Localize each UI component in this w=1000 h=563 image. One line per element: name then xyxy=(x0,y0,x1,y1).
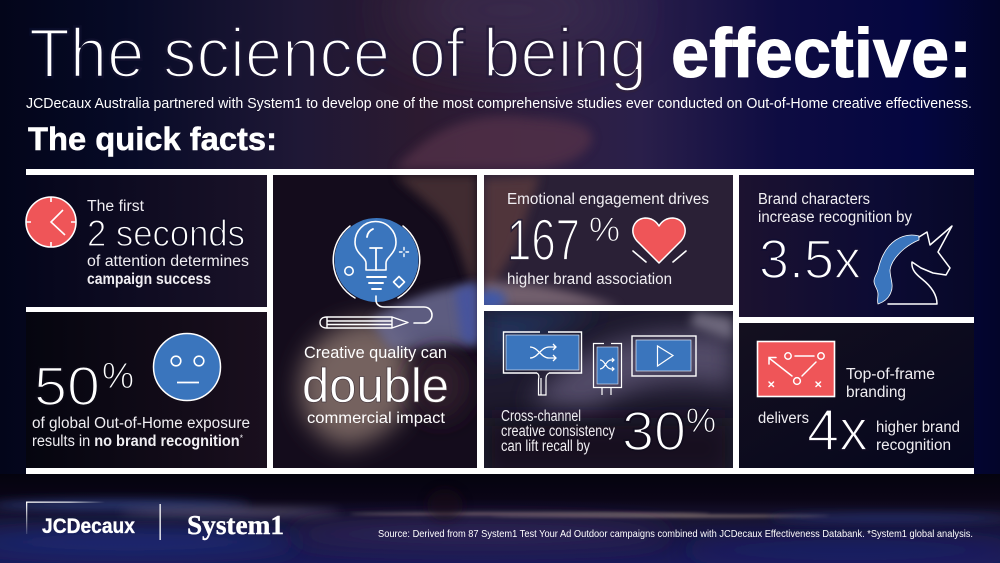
icon: light bulb and pencil xyxy=(320,218,432,328)
stat: 2 seconds: 2 seconds xyxy=(87,213,245,254)
text: higher brand recognition: recognition xyxy=(876,437,951,454)
icon: clock xyxy=(26,197,76,247)
text: higher brand recognition: higher brand xyxy=(876,419,960,436)
panel: cross-channel xyxy=(484,311,733,478)
text: no brand recognition: * xyxy=(240,433,243,443)
text: commercial impact: commercial impact xyxy=(307,410,446,427)
panel: top-of-frame xyxy=(739,323,974,468)
text: no brand recognition: results in no brand recognition xyxy=(32,433,249,450)
white grid frame xyxy=(26,169,974,474)
text: cross-channel: creative consistency xyxy=(501,423,615,440)
text: of global exposure: of global Out-of-Home exposure xyxy=(32,415,250,432)
text: higher brand recognition xyxy=(876,419,960,454)
subtitle: JCDecaux Australia partnered with System1 to develop one of the most comprehensive studies ever conducted on Out-of-Home creative effectiveness. xyxy=(26,95,972,112)
stat: 30 percent xyxy=(622,400,716,462)
text: delivers: delivers xyxy=(758,410,809,427)
icon: playbook xyxy=(758,342,834,396)
text: cross-channel: Cross-channel xyxy=(501,408,581,425)
text: of attention: of attention determines xyxy=(87,253,249,270)
icon: billboards xyxy=(504,332,696,395)
text: the first: The first xyxy=(87,198,145,215)
text: top-of-frame branding xyxy=(846,366,935,401)
stat: 167 percent: % xyxy=(589,211,620,249)
heading: quick facts: The quick facts: xyxy=(28,121,277,157)
pencil xyxy=(320,317,408,328)
icon: heart xyxy=(633,218,686,263)
stat: 50 percent xyxy=(34,355,134,417)
text: top-of-frame branding: branding xyxy=(846,384,906,401)
logo: System1: System1 xyxy=(187,510,284,540)
stat: 167 percent: 167 xyxy=(507,208,580,273)
stat: 50 percent: 50 xyxy=(34,355,100,417)
text: cross-channel: can lift recall by xyxy=(501,438,590,455)
text: cross-channel xyxy=(501,408,615,455)
logo: JCDecaux xyxy=(26,502,135,538)
text: brand characters: increase recognition by xyxy=(758,209,912,226)
icon: neutral face xyxy=(154,334,220,400)
panel: emotional engagement xyxy=(474,175,733,310)
title: The science of being xyxy=(29,14,647,92)
panel: creative quality xyxy=(273,175,477,468)
panel: brand characters xyxy=(739,175,974,317)
icon: unicorn xyxy=(874,226,952,304)
stat: double: double xyxy=(302,360,449,413)
stat: 30 percent: % xyxy=(686,402,716,440)
text: emotional engagement drives: Emotional engagement drives xyxy=(507,191,709,208)
wire xyxy=(376,296,432,323)
text: brand characters: Brand characters xyxy=(758,191,870,208)
text: brand characters xyxy=(758,191,912,226)
title: effective: xyxy=(671,14,972,92)
panel: two seconds xyxy=(26,175,267,307)
text: top-of-frame branding: Top-of-frame xyxy=(846,366,935,383)
text: campaign success: campaign success xyxy=(87,271,211,288)
divider xyxy=(160,504,161,540)
text: creative quality can: Creative quality can xyxy=(304,344,447,362)
panel: no brand recognition xyxy=(26,312,267,468)
logo: JCDecaux: JCDecaux xyxy=(42,515,135,538)
stat: 3.5x: 3.5x xyxy=(759,228,861,290)
stat: 4x: 4x xyxy=(807,398,868,463)
title xyxy=(29,14,972,92)
stat: 30 percent: 30 xyxy=(622,400,686,462)
stat: 50 percent: % xyxy=(102,355,134,396)
text: higher brand association: higher brand association xyxy=(507,271,672,288)
